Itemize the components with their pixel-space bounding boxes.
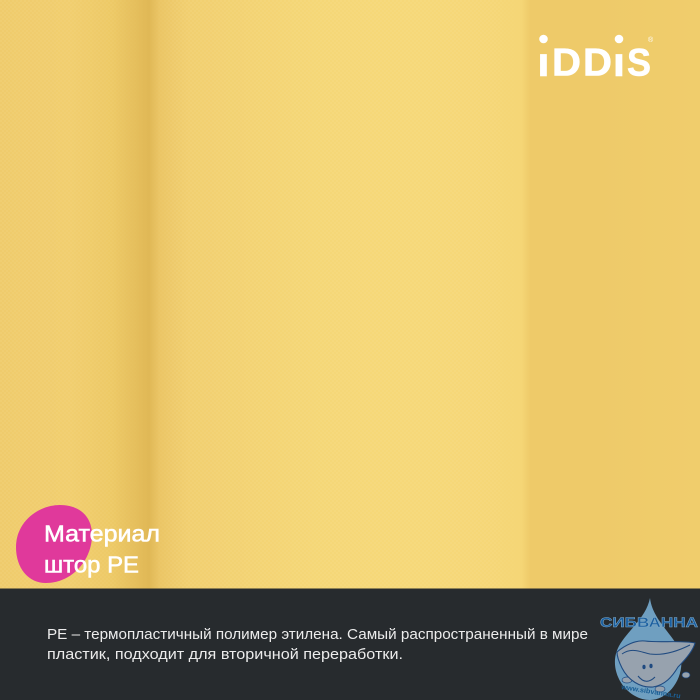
footer description text: пластик, подходит для вторичной переработки. [47,646,403,663]
bathtub [617,641,695,687]
website: www.sibvanna.ru [620,684,681,700]
dark footer panel [0,588,700,700]
bathtub face [638,664,655,681]
heading text: Материал [44,520,160,546]
water drop [615,598,681,700]
bathtub rim [622,645,690,654]
bathtub legs [622,672,690,692]
logo: IDDIS: ® [648,36,654,44]
footer description text: PE – термопластичный полимер этилена. Самый распространенный в мире [47,626,588,643]
background: yellow fabric curtain [0,0,523,588]
logo: IDDIS [538,35,654,84]
footer description text [47,626,588,663]
pink blob [16,505,92,583]
logo: IDDIS: D [583,42,612,84]
heading: material badge [16,505,160,583]
logo: IDDIS: S [627,42,651,84]
logo: IDDIS: D [552,42,581,84]
watermark: Sibvanna logo [600,598,698,700]
logo: IDDIS: ı [614,42,624,84]
logo: IDDIS: ı [538,42,549,84]
heading text [44,520,160,578]
brand name: СИБВАННА [600,614,698,630]
heading text: штор PE [44,552,139,578]
